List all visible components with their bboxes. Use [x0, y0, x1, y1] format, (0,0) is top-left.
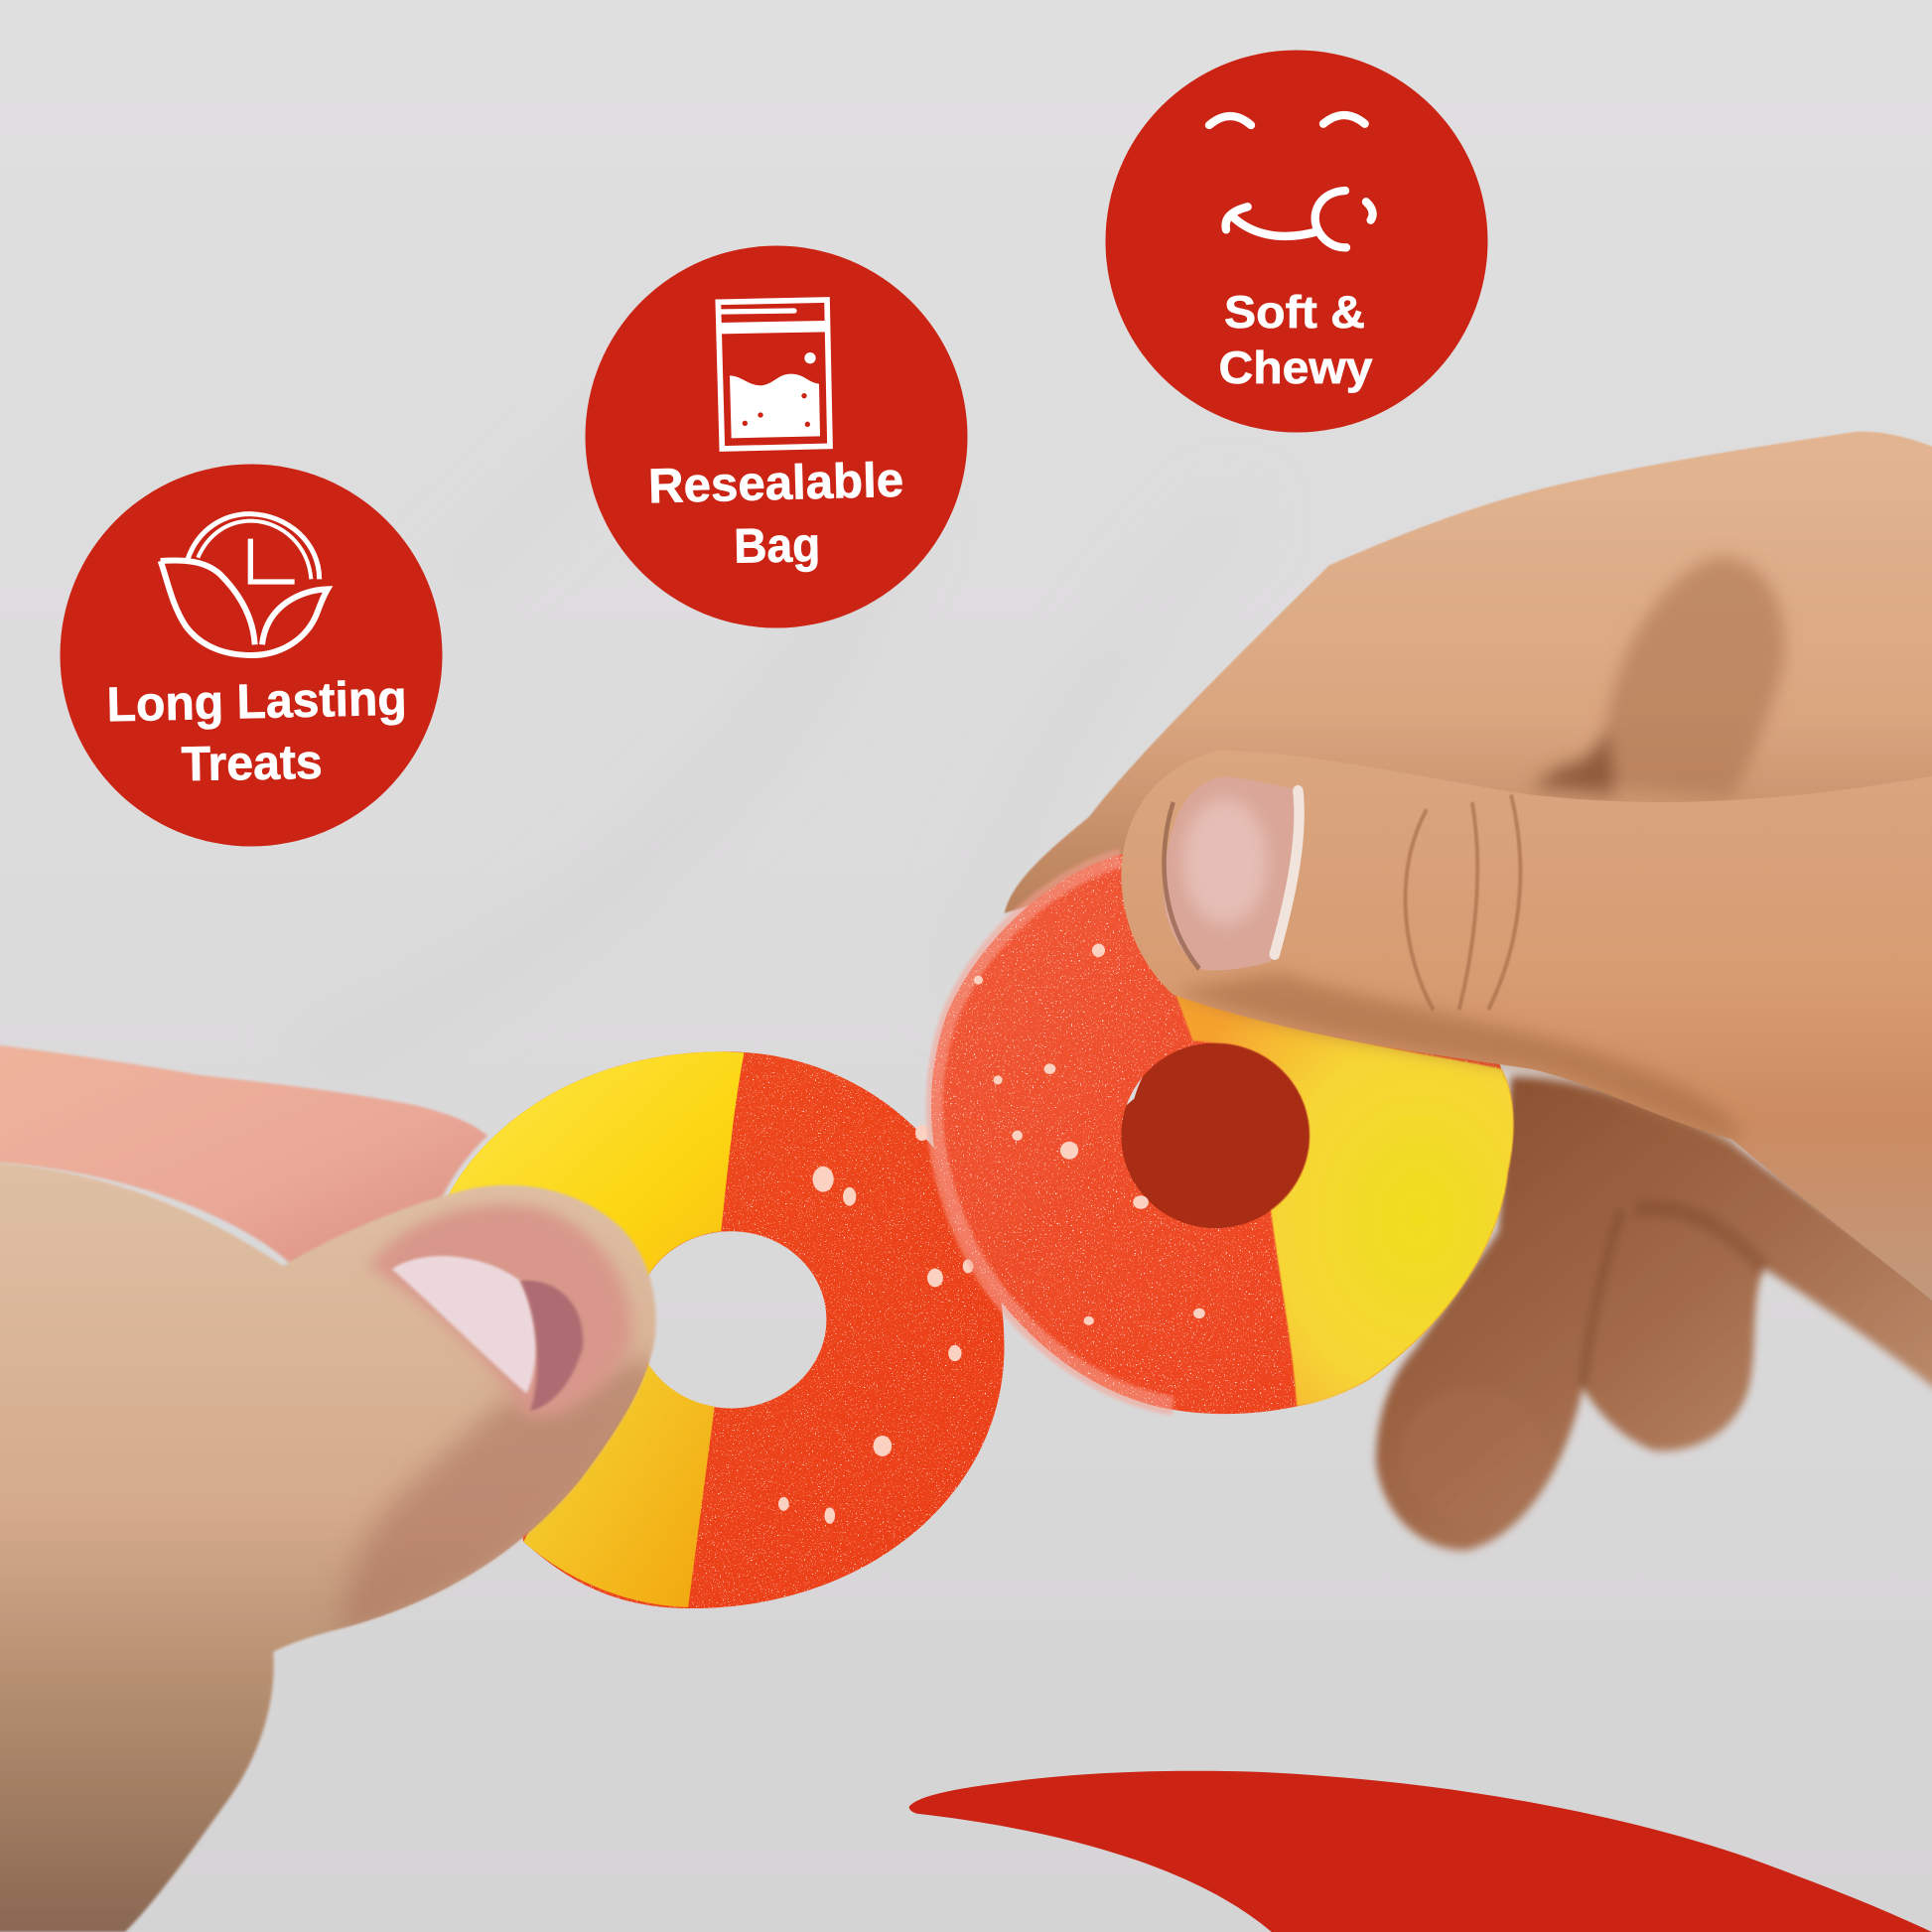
- right hand: lower fingers: [1376, 1076, 1932, 1551]
- thumbnail: [392, 1256, 536, 1394]
- badge circle: [60, 465, 443, 846]
- icon: licking smiley face: [1209, 115, 1373, 247]
- sugar grains: [920, 847, 1524, 1425]
- sugar grains: [428, 1045, 1021, 1614]
- icon: resealable bag: [718, 300, 830, 449]
- yellow upper band: [448, 1051, 745, 1319]
- badge: long lasting treats: [60, 465, 443, 846]
- thumbnail: [1164, 776, 1304, 970]
- badge: resealable bag: [586, 246, 967, 627]
- label: Long Lasting: [106, 672, 407, 732]
- thumb knuckle creases: [1405, 795, 1520, 1010]
- sugar clumps: [974, 944, 1205, 1325]
- thumb tip shading: [343, 1204, 665, 1637]
- right hand behind ring: [1005, 432, 1932, 1551]
- dark nail base: [520, 1281, 583, 1411]
- thumb lower shadow: [1173, 973, 1741, 1140]
- badge circle: [586, 246, 967, 627]
- shaded finger pad: [1531, 557, 1785, 798]
- yellow lower band: [523, 1319, 715, 1607]
- label: Treats: [181, 736, 323, 791]
- thumb body and wrist: [0, 1162, 656, 1932]
- yellow band: [1173, 988, 1513, 1406]
- right hand: thumb: [1121, 751, 1932, 1317]
- label: Resealable: [647, 454, 904, 513]
- label: Chewy: [1219, 342, 1373, 393]
- ring body: [931, 854, 1513, 1414]
- background fabric folds: [321, 308, 1232, 1059]
- badge: soft and chewy: [1106, 50, 1487, 433]
- left hand: back finger: [0, 1042, 487, 1263]
- label: Bag: [734, 518, 821, 574]
- pale sugar crust: [934, 858, 1173, 1406]
- badge circle: [1106, 50, 1487, 433]
- left hand: front thumb: [0, 1162, 665, 1932]
- left gummy ring: [428, 1045, 1021, 1614]
- dark finger seen through ring hole: [1115, 1035, 1316, 1236]
- right gummy ring: [920, 847, 1524, 1425]
- ring body: [448, 1051, 1005, 1608]
- background sliver in hole: [1121, 1046, 1164, 1110]
- sugar clumps: [778, 1125, 973, 1524]
- red swoosh: [909, 1771, 1932, 1932]
- right hand: index finger: [1005, 432, 1932, 1010]
- label: Soft &: [1224, 286, 1365, 338]
- icon: leaves and clock: [161, 514, 328, 655]
